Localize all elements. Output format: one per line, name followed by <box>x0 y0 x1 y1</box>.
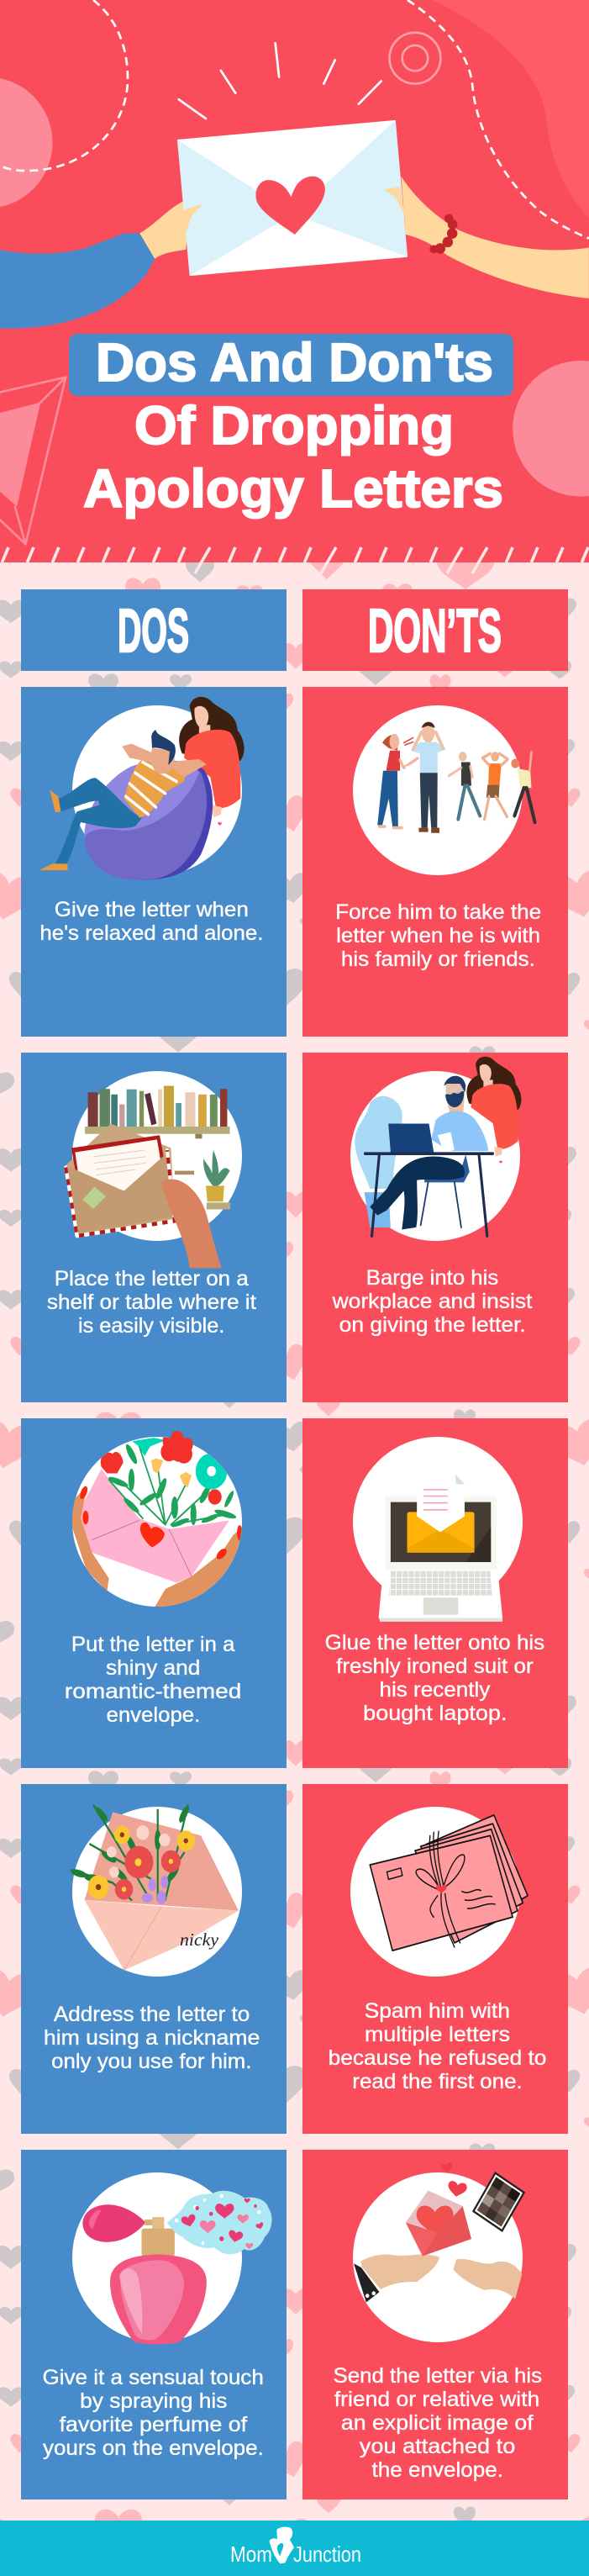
caption <box>65 1633 241 1727</box>
caption: Give the letter when <box>55 898 249 921</box>
caption: Force him to take the <box>335 900 541 924</box>
column header: dos <box>21 589 287 671</box>
caption: on giving the letter. <box>339 1313 526 1337</box>
caption <box>333 2364 542 2482</box>
caption <box>332 1266 532 1337</box>
icon: envelope and bookshelf <box>66 1086 230 1268</box>
caption: him using a nickname <box>44 2026 260 2050</box>
caption: envelope. <box>106 1703 200 1727</box>
caption <box>47 1267 256 1338</box>
icon: letter between hands with photo <box>354 2162 524 2302</box>
caption: Address the letter to <box>54 2003 250 2026</box>
caption: yours on the envelope. <box>43 2436 264 2460</box>
logo: Mom <box>230 2542 272 2567</box>
caption: read the first one. <box>352 2070 523 2093</box>
caption: his recently <box>380 1678 491 1702</box>
caption: only you use for him. <box>51 2050 252 2073</box>
illustration: hands passing envelope <box>0 120 589 329</box>
icon: workplace scene <box>355 1057 521 1236</box>
caption: Glue the letter onto his <box>325 1631 544 1655</box>
handwritten nickname: nicky <box>180 1929 219 1950</box>
title: Dos And Don'ts <box>96 332 493 393</box>
zigzag stitches <box>2 547 588 573</box>
caption <box>42 2366 264 2460</box>
panel: don't 2 <box>302 1053 568 1402</box>
caption: he's relaxed and alone. <box>39 921 263 945</box>
caption: letter when he is with <box>336 924 540 948</box>
panel: do 3 <box>21 1418 287 1768</box>
icon: man relaxing on bean bag <box>40 697 245 880</box>
caption: Put the letter in a <box>71 1633 234 1656</box>
logo <box>230 2527 361 2567</box>
caption <box>329 1999 546 2093</box>
column header: don'ts <box>302 589 568 671</box>
title: Apology Letters <box>83 458 503 519</box>
icon: laptop with envelope <box>379 1474 502 1622</box>
caption: favorite perfume of <box>60 2413 247 2436</box>
caption: Place the letter on a <box>55 1267 249 1291</box>
caption: Barge into his <box>366 1266 498 1290</box>
caption <box>335 900 541 971</box>
icon: pink floral envelope in hands <box>72 1431 245 1608</box>
caption: bought laptop. <box>363 1702 507 1725</box>
caption: Give it a sensual touch <box>42 2366 264 2389</box>
icon: bundle of letters <box>370 1815 528 1950</box>
title: Of Dropping <box>134 395 454 456</box>
caption: freshly ironed suit or <box>336 1655 534 1678</box>
caption: shelf or table where it <box>47 1291 256 1314</box>
panel: do 4 <box>21 1784 287 2134</box>
caption <box>325 1631 544 1725</box>
caption: multiple letters <box>365 2023 510 2046</box>
caption: you attached to <box>360 2435 515 2458</box>
panel: don't 5 <box>302 2150 568 2499</box>
icon: perfume bottle <box>82 2191 272 2344</box>
caption: because he refused to <box>329 2046 546 2070</box>
logo: Junction <box>293 2542 361 2567</box>
icon: envelope with bouquet <box>70 1804 239 1971</box>
caption: an explicit image of <box>341 2411 534 2435</box>
caption: is easily visible. <box>78 1314 224 1338</box>
panel: don't 1 <box>302 687 568 1037</box>
title <box>69 332 513 519</box>
panel: don't 3 <box>302 1418 568 1768</box>
caption: Spam him with <box>365 1999 510 2023</box>
caption: Send the letter via his <box>333 2364 542 2388</box>
panel: do 1 <box>21 687 287 1037</box>
panel: do 2 <box>21 1053 287 1402</box>
caption: friend or relative with <box>334 2388 539 2411</box>
panel: do 5 <box>21 2150 287 2499</box>
column header: dos: DOS <box>118 598 189 665</box>
caption <box>39 898 263 945</box>
caption <box>44 2003 260 2073</box>
caption: romantic-themed <box>65 1680 241 1703</box>
header banner <box>0 0 589 562</box>
caption: the envelope. <box>371 2458 503 2482</box>
caption: shiny and <box>106 1656 200 1680</box>
footer <box>0 2521 589 2576</box>
title highlight <box>69 334 513 396</box>
panel: don't 4 <box>302 1784 568 2134</box>
caption: by spraying his <box>80 2389 227 2413</box>
caption: workplace and insist <box>332 1290 532 1313</box>
caption: his family or friends. <box>341 948 535 971</box>
icon: people arguing <box>377 722 535 833</box>
